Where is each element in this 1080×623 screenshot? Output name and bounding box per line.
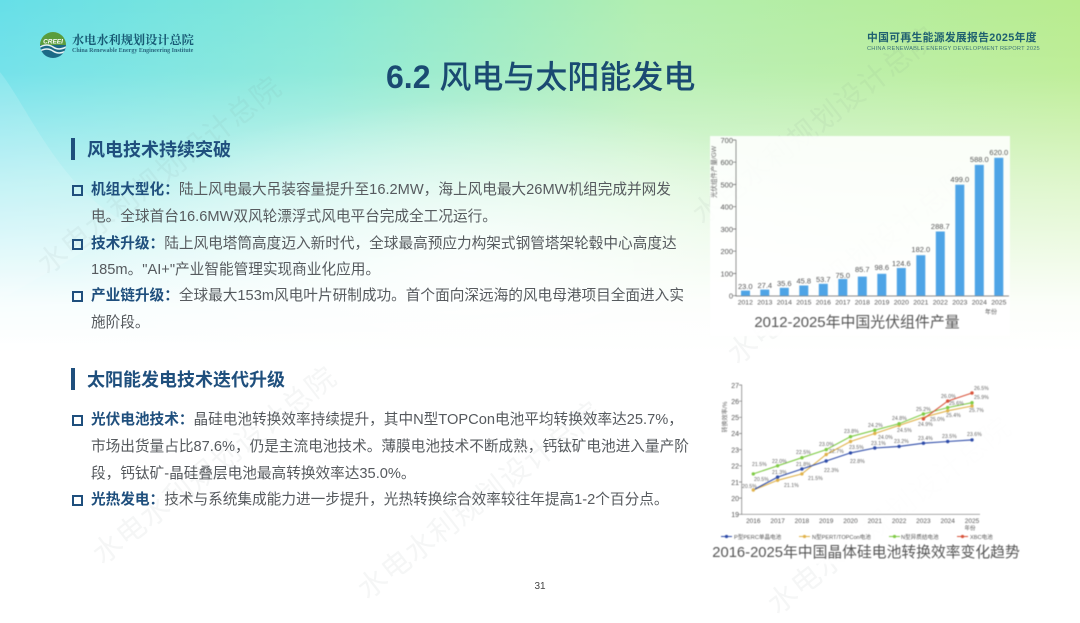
bullet — [72, 239, 83, 250]
line chart: cell efficiency: 25.6% — [949, 401, 964, 407]
bar chart: PV module output: 124.6 — [892, 259, 911, 268]
line chart: cell efficiency: 25.0% — [930, 417, 945, 423]
bar chart: PV module output: 100 — [720, 270, 733, 278]
line chart: cell efficiency: 2016-2025年中国晶体硅电池转换效率变化趋势 — [712, 544, 1020, 561]
bullet — [72, 185, 83, 196]
text: large turbines line 2: 电。全球首台16.6MW双风轮漂浮式风电平台完成全工况运行。 — [91, 209, 497, 225]
report title — [867, 32, 1040, 52]
bar chart: PV module output: 288.7 — [931, 222, 950, 231]
bar chart: PV module output: 182.0 — [911, 245, 930, 254]
bar chart: PV module output: 2021 — [913, 300, 929, 306]
line chart: cell efficiency: 23.4% — [918, 436, 933, 442]
line chart: cell efficiency: 22.8% — [850, 459, 865, 465]
line chart: cell efficiency: N型异质结电池 — [901, 533, 939, 541]
line chart: cell efficiency: 25 — [731, 415, 739, 422]
line chart: cell efficiency: 24.2% — [868, 423, 883, 429]
line chart: cell efficiency: 26.5% — [974, 386, 989, 392]
bar chart: PV module output: 588.0 — [970, 155, 989, 164]
bar chart: PV module output: 2025 — [991, 300, 1007, 306]
line chart: cell efficiency: 23.6% — [967, 432, 982, 438]
bar chart: PV module output: 400 — [720, 203, 733, 212]
line chart: cell efficiency: 2025 — [965, 518, 980, 525]
bar chart: PV module output: 98.6 — [874, 263, 889, 272]
heading bar — [71, 368, 75, 390]
icon: CREEI globe: CREEI — [43, 38, 63, 46]
bar chart: PV module output: 2017 — [835, 300, 851, 306]
bar chart: PV module output: 2020 — [894, 300, 909, 306]
bar chart: PV module output: 2024 — [972, 300, 987, 306]
line chart: cell efficiency: 22.3% — [824, 468, 839, 474]
bar chart: PV module output: 年份 — [985, 308, 997, 316]
line chart: cell efficiency: 21.5% — [808, 476, 823, 482]
line chart: cell efficiency: 2016 — [746, 518, 761, 525]
line chart: cell efficiency: 22.0% — [772, 459, 787, 465]
text: PV cells line 2: 市场出货量占比87.6%，仍是主流电池技术。薄膜电池技术不断成熟，钙钛矿电池进入量产阶 — [91, 439, 689, 455]
line chart: cell efficiency: 2018 — [795, 518, 810, 525]
line chart: cell efficiency: 2023 — [916, 518, 931, 525]
line chart: cell efficiency: 23.2% — [894, 439, 909, 445]
line chart: cell efficiency: 26 — [731, 399, 739, 406]
bar chart: PV module output: 2016 — [816, 300, 831, 306]
text: PV cells line 3: 段，钙钛矿-晶硅叠层电池最高转换效率达35.0%。 — [91, 466, 416, 482]
icon: CREEI globe — [40, 32, 66, 58]
line chart: cell efficiency: 24.5% — [897, 428, 912, 434]
line chart: cell efficiency: 21.3% — [772, 470, 787, 476]
line chart: cell efficiency: 23.8% — [844, 429, 859, 435]
text: 水电水利规划设计总院 — [352, 396, 608, 606]
bar chart: PV module output: 0 — [729, 292, 733, 301]
bar chart: PV module output: 2019 — [874, 300, 890, 306]
logo english name: China Renewable Energy Engineering Institute — [72, 48, 193, 54]
line chart: cell efficiency: 24.8% — [892, 416, 907, 422]
line chart: cell efficiency: 23.5% — [849, 445, 864, 451]
line chart: cell efficiency: 23 — [731, 448, 739, 454]
text: tech upgrade: 技术升级：陆上风电塔筒高度迈入新时代，全球最高预应力构架式钢管塔架轮毂中心高度达 — [91, 236, 677, 252]
panel: solar power text — [71, 368, 689, 508]
heading: solar: 太阳能发电技术迭代升级 — [87, 370, 285, 390]
text: CSP: 光热发电：技术与系统集成能力进一步提升，光热转换综合效率较往年提高1-2个百分点。 — [91, 492, 669, 508]
line chart: cell efficiency: 24.0% — [878, 435, 893, 441]
bar chart: PV module output: 53.7 — [816, 275, 831, 284]
line chart: cell efficiency: 21.1% — [784, 483, 799, 489]
heading: wind: 风电技术持续突破 — [87, 140, 231, 160]
line chart: cell efficiency: P型PERC单晶电池 — [734, 533, 782, 541]
bar chart: PV module output: 27.4 — [757, 281, 772, 290]
bar chart: PV module output: 35.6 — [777, 279, 792, 288]
text: 水电水利规划设计总院 — [722, 161, 978, 371]
heading bar — [71, 138, 75, 160]
text: supply chain line 2: 施阶段。 — [91, 315, 150, 331]
line chart: cell efficiency: 20 — [731, 496, 739, 503]
bar chart: PV module output: 75.0 — [835, 271, 850, 280]
panel: wind power text — [71, 138, 684, 331]
bar chart: PV module output: 500 — [720, 180, 733, 190]
line chart: cell efficiency: 25.4% — [946, 413, 961, 419]
report title: 中国可再生能源发展报告2025年度 — [867, 32, 1037, 44]
bar chart: PV module output: 2012 — [738, 300, 753, 306]
title: 6.2 风电与太阳能发电 — [386, 59, 695, 95]
text: 水电水利规划设计总院 — [87, 361, 343, 571]
logo — [40, 32, 194, 58]
bullet — [72, 495, 83, 506]
line chart: cell efficiency: 2017 — [770, 518, 785, 525]
bar chart: PV module output: 45.8 — [796, 276, 811, 286]
line chart: cell efficiency: 22 — [731, 464, 739, 470]
page number: 31 — [534, 581, 546, 592]
line chart: cell efficiency: 24 — [731, 431, 739, 438]
bar chart: PV module output: 600 — [720, 158, 733, 167]
line chart: cell efficiency: 2022 — [892, 518, 907, 525]
bullet — [72, 291, 83, 302]
line chart: cell efficiency: 2020 — [843, 518, 858, 525]
bar chart: PV module output: 2014 — [777, 300, 792, 306]
line chart: cell efficiency: 27 — [731, 383, 739, 390]
line chart: cell efficiency: 年份 — [964, 524, 976, 532]
line chart: cell efficiency: 20.5% — [754, 477, 769, 483]
bar chart: PV module output: 2012-2025年中国光伏组件产量 — [754, 314, 960, 331]
line chart: cell efficiency: 24.9% — [918, 422, 933, 428]
line chart: cell efficiency: 21 — [731, 480, 739, 487]
bar chart: PV module output: 2018 — [855, 300, 870, 306]
text: 水电水利规划设计总院 — [32, 71, 288, 281]
line chart: cell efficiency — [712, 382, 1020, 564]
line chart: cell efficiency: 23.0% — [819, 442, 834, 448]
text: 水电水利规划设计总院 — [687, 21, 943, 231]
bar chart: PV module output — [709, 136, 1010, 336]
bar chart: PV module output: 2022 — [933, 300, 948, 306]
line chart: cell efficiency: 20.5% — [742, 484, 757, 490]
bar chart: PV module output: 85.7 — [855, 265, 870, 274]
bar chart: PV module output: 200 — [720, 247, 733, 256]
line chart: cell efficiency: 23.5% — [942, 434, 957, 440]
line chart: cell efficiency: 22.7% — [829, 449, 844, 455]
text: 水电水利规划设计总院 — [762, 411, 1018, 621]
line chart: cell efficiency: 转换效率/% — [721, 401, 729, 433]
line chart: cell efficiency: 23.1% — [871, 441, 886, 447]
line chart: cell efficiency: 21.5% — [752, 462, 767, 468]
bar chart: PV module output: 2023 — [952, 300, 968, 306]
line chart: cell efficiency: 21.8% — [796, 462, 811, 468]
report title: CHINA RENEWABLE ENERGY DEVELOPMENT REPORT 2025 — [867, 46, 1040, 52]
text: large turbines: 机组大型化：陆上风电最大吊装容量提升至16.2MW，海上风电最大26MW机组完成并网发 — [91, 182, 671, 198]
logo name: 水电水利规划设计总院 — [72, 33, 194, 47]
line chart: cell efficiency: 2021 — [868, 518, 882, 525]
text: supply chain: 产业链升级：全球最大153m风电叶片研制成功。首个面向深远海的风电母港项目全面进入实 — [91, 288, 684, 304]
line chart: cell efficiency: 25.9% — [974, 395, 989, 401]
bar chart: PV module output: 700 — [720, 136, 733, 145]
line chart: cell efficiency: 25.7% — [969, 408, 984, 414]
bar chart: PV module output: 2013 — [757, 300, 773, 306]
bullet — [72, 415, 83, 426]
text: PV cells: 光伏电池技术：晶硅电池转换效率持续提升，其中N型TOPCon电池平均转换效率达25.7%， — [91, 412, 683, 428]
line chart: cell efficiency: N型PERT/TOPCon电池 — [812, 533, 871, 541]
bar chart: PV module output: 620.0 — [989, 148, 1008, 157]
line chart: cell efficiency: 25.2% — [916, 407, 931, 413]
line chart: cell efficiency: 2019 — [819, 518, 834, 525]
bar chart: PV module output: 300 — [720, 225, 733, 234]
line chart: cell efficiency: XBC电池 — [970, 533, 993, 541]
bar chart: PV module output: 499.0 — [950, 175, 969, 184]
bar chart: PV module output: 光伏组件产量/GW — [709, 145, 718, 198]
line chart: cell efficiency: 22.5% — [796, 450, 811, 456]
line chart: cell efficiency: 19 — [731, 512, 739, 519]
line chart: cell efficiency: 2024 — [940, 518, 955, 525]
text: tech upgrade line 2: 185m。"AI+"产业智能管理实现商业化应用。 — [91, 262, 380, 278]
line chart: cell efficiency: 26.0% — [941, 394, 956, 400]
bar chart: PV module output: 2015 — [796, 300, 812, 306]
bar chart: PV module output: 23.0 — [738, 282, 753, 291]
